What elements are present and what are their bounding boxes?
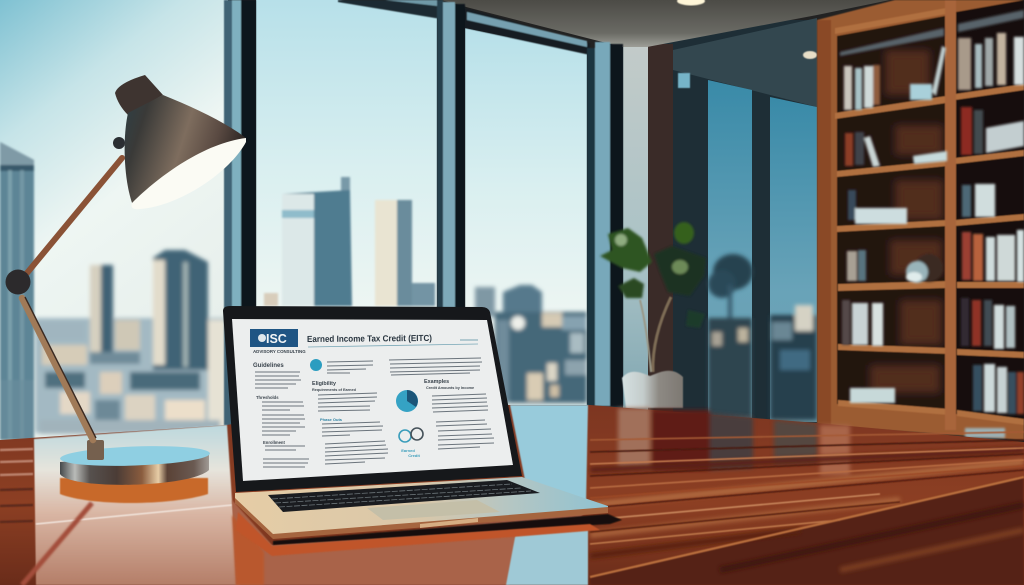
- left column heading: Guidelines: [253, 363, 284, 369]
- shade opening glow: [131, 138, 246, 209]
- bookshelf: [817, 0, 1024, 440]
- brown column: [648, 44, 673, 414]
- cityscape: right pane skyline: [475, 285, 587, 403]
- back panel highlights: [870, 50, 943, 393]
- left column text: [255, 372, 309, 467]
- left column subheads: Thresholds: [256, 395, 279, 400]
- glass pane near wall: [708, 80, 752, 420]
- top light strips: [840, 10, 1024, 56]
- shade bracket: [113, 137, 125, 149]
- window: right pane with sky: [465, 28, 587, 420]
- wall column: [623, 40, 648, 415]
- tree and city reflection in glass: [708, 254, 817, 420]
- ISC logo: [250, 329, 298, 347]
- ceiling light: [677, 0, 705, 6]
- upper glass wall: [673, 18, 817, 107]
- books right bays: [958, 33, 1024, 438]
- shade cap: [115, 75, 163, 115]
- faint streak on pale reflection: [36, 505, 232, 524]
- middle column subhead: Requirements of Earned: [312, 388, 357, 392]
- lamp joint: [6, 270, 30, 294]
- keyboard: [268, 480, 540, 512]
- trackpad: [367, 500, 500, 520]
- lower arm: [22, 298, 93, 440]
- left column subheads: Enrollment: [263, 440, 285, 445]
- laptop shadow: [273, 514, 622, 545]
- right bays: [956, 0, 1024, 424]
- plant in white pot: [600, 222, 706, 408]
- lamp base edge: [60, 453, 209, 485]
- ceiling: [441, 0, 890, 47]
- pale reflection beneath laptop: [506, 526, 588, 585]
- right column subhead: Credit Amounts by Income: [426, 386, 474, 390]
- laptop reflection band: [236, 512, 600, 556]
- desk front darker zone: [590, 477, 1024, 585]
- ISC logo: ISC: [266, 332, 287, 346]
- middle column blue subhead: Phase Outs: [320, 417, 343, 422]
- cityscape: middle pane buildings: [264, 177, 435, 306]
- cream spot light: [803, 51, 817, 59]
- shelf frame: [817, 0, 1024, 440]
- lid: [223, 306, 522, 492]
- key rows: [272, 484, 531, 507]
- lamp arm reflection: [22, 503, 92, 585]
- icon caption: Earned: [401, 448, 415, 453]
- desk vertical reflections: [618, 408, 850, 475]
- upper arm: [27, 158, 122, 273]
- globe ornament: [906, 254, 943, 283]
- small pale square window: [678, 73, 690, 88]
- desk broad wood bands: [590, 450, 1024, 570]
- lamp base reflection: [60, 478, 208, 503]
- lower arm dark edge: [25, 297, 96, 438]
- shelf boards left: [835, 8, 949, 415]
- middle column heading: Eligibility: [312, 381, 336, 387]
- logo subtitle: ADVISORY CONSULTING: [253, 349, 306, 354]
- middle column icon: [310, 359, 322, 371]
- glass pane near shelves: [770, 97, 817, 422]
- window frames: [224, 0, 623, 430]
- desk surface: [0, 405, 1024, 585]
- screen content: [250, 329, 494, 467]
- lid notch: [420, 518, 478, 528]
- vertical divider: [945, 0, 956, 430]
- cityscape: left skyline: [35, 250, 227, 434]
- orange reflection left of laptop: [232, 515, 264, 585]
- cool reflection right of laptop: [510, 405, 588, 505]
- small header note: [460, 339, 478, 341]
- desk wood grain: [0, 432, 1024, 577]
- pale window reflection on desk: [34, 425, 240, 585]
- laptop front edge: [235, 498, 608, 539]
- left column subheads: [256, 395, 285, 445]
- middle column text: [318, 361, 388, 464]
- plant leaves: [600, 222, 706, 328]
- books left bays: [842, 46, 947, 403]
- pie chart: [396, 390, 418, 412]
- screen title: Earned Income Tax Credit (EITC): [307, 333, 432, 344]
- shade body: [125, 95, 246, 208]
- salmon zone beneath laptop: [232, 500, 586, 585]
- window: middle pane with sky: [256, 0, 437, 420]
- icon caption second line: Credit: [408, 453, 420, 458]
- dark interior back wall: [610, 20, 820, 430]
- desk lamp: [6, 75, 246, 503]
- left frame stile: [817, 20, 831, 425]
- lamp base top: [60, 444, 210, 468]
- right column intro text: [389, 358, 494, 449]
- lamp collar: [87, 440, 104, 460]
- laptop base: [235, 477, 608, 535]
- laptop: [223, 306, 622, 556]
- title rule: [308, 344, 478, 347]
- scale icons: [399, 428, 423, 442]
- shelf boards right: [955, 84, 1024, 425]
- plant stems: [640, 297, 671, 372]
- cityscape: tall tower at left edge: [0, 142, 34, 440]
- window: left pane with sky: [0, 0, 228, 445]
- white pot: [622, 371, 683, 408]
- right column heading: Examples: [424, 379, 449, 385]
- left bays: [837, 16, 945, 412]
- screen: [232, 319, 513, 481]
